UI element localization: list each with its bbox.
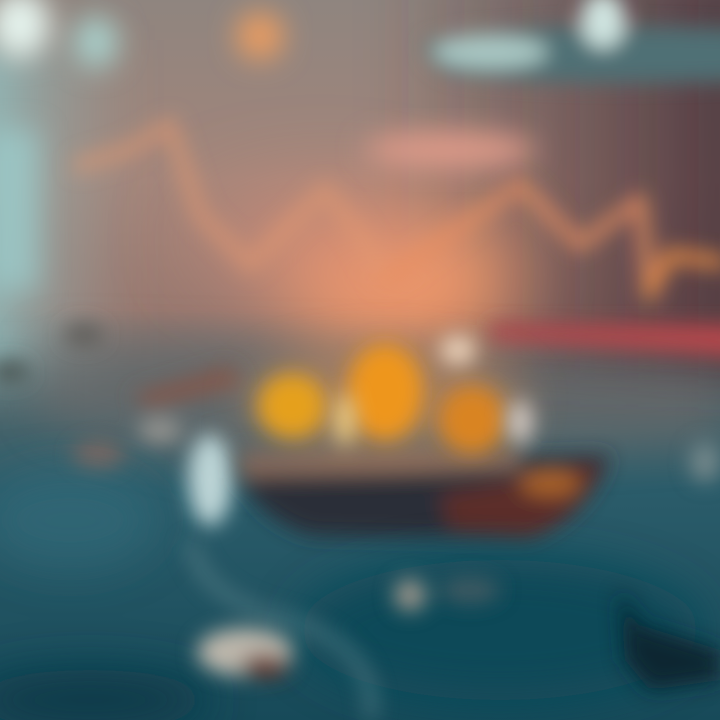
- top highlights: [0, 0, 720, 290]
- winding pale path: [190, 540, 371, 720]
- coin: middle: [347, 344, 423, 440]
- orange lamp: [236, 12, 284, 60]
- dark teal water pools: [0, 470, 700, 720]
- zigzag chart line: [80, 125, 720, 295]
- glow around coins: [245, 350, 525, 450]
- light spots top left: [0, 0, 118, 290]
- coin: left: [258, 374, 326, 438]
- white vertical splash: [188, 434, 232, 526]
- bottom objects: [197, 442, 720, 678]
- red diagonal band: [490, 324, 720, 358]
- floor haze: [40, 340, 720, 470]
- lamp shade top right: [425, 0, 720, 83]
- small floating objects: [0, 324, 245, 469]
- pale teal glow on the left: [0, 40, 130, 380]
- coin highlights: [335, 335, 533, 446]
- dark silhouette bottom right: [620, 590, 720, 690]
- orange central glow: [190, 185, 515, 355]
- coin: right: [438, 386, 506, 454]
- boat: [238, 445, 610, 540]
- coins: [245, 335, 533, 454]
- dark right side of the wall: [0, 0, 720, 380]
- pink chart band: [364, 131, 536, 169]
